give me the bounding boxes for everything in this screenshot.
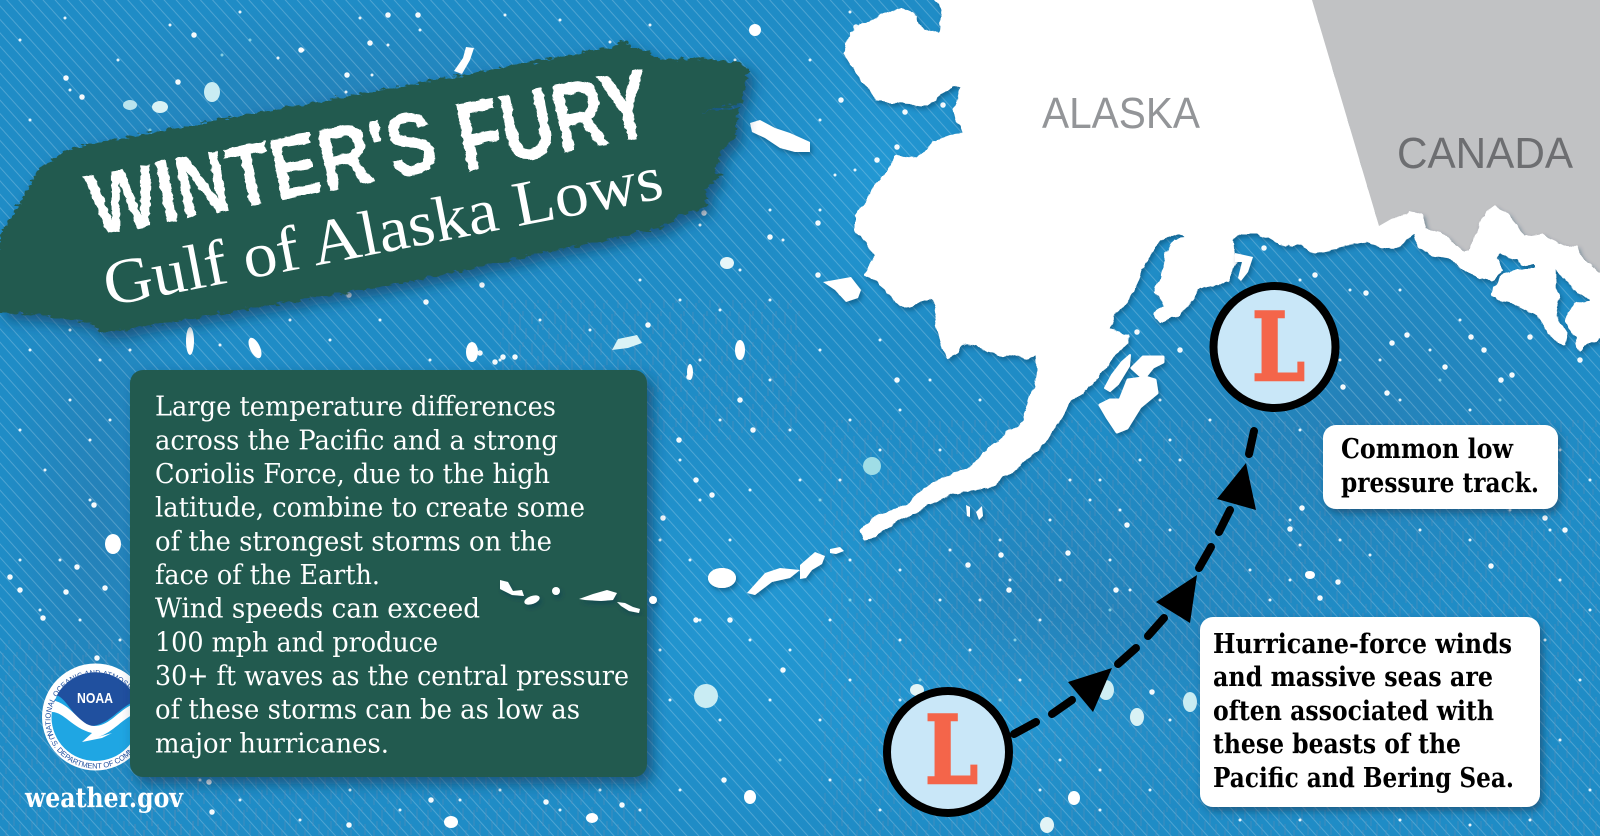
low pressure symbol: start <box>887 691 1009 813</box>
title: WINTER'S <box>80 90 444 255</box>
title: FURY <box>447 47 660 193</box>
callout: hurricane-force winds: these beasts of the <box>1213 729 1461 760</box>
callout: hurricane-force winds <box>1200 617 1540 807</box>
title brush stroke <box>0 40 749 332</box>
NOAA logo <box>42 664 130 770</box>
panel text block: Wind speeds can exceed <box>155 594 480 624</box>
panel text block: latitude, combine to create some <box>155 492 585 524</box>
Alaska landmass <box>845 0 1600 540</box>
callout: hurricane-force winds: and massive seas are <box>1213 662 1493 693</box>
NOAA logo: U.S. DEPARTMENT OF COMMERCE <box>48 734 130 769</box>
callout: track <box>1323 425 1558 509</box>
NOAA logo: NOAA <box>77 690 113 707</box>
panel text block: face of the Earth. <box>155 560 380 591</box>
panel text block: major hurricanes. <box>155 728 389 760</box>
panel text block: of these storms can be as low as <box>155 694 580 726</box>
ice flakes <box>105 24 1315 833</box>
Canada landmass <box>1312 0 1600 290</box>
panel text block: 100 mph and produce <box>155 628 438 658</box>
panel text block: of the strongest storms on the <box>155 526 552 558</box>
panel text block: across the Pacific and a strong <box>155 426 558 456</box>
callout: hurricane-force winds: Pacific and Bering Sea. <box>1213 763 1514 794</box>
callout: track: Common low <box>1341 434 1514 465</box>
panel background <box>130 370 647 777</box>
islands: Nunivak, Kodiak, Aleutians <box>708 120 1253 595</box>
label: Canada: CANADA <box>1397 129 1574 178</box>
panel text block: Coriolis Force, due to the high <box>155 459 550 490</box>
panel: explanation text <box>42 368 664 793</box>
low pressure symbol: end <box>1214 286 1336 408</box>
panel text block: 30+ ft waves as the central pressure <box>155 661 629 692</box>
islands over panel: western Aleutians <box>500 580 657 613</box>
label: Alaska: ALASKA <box>1042 89 1201 138</box>
callout: hurricane-force winds: often associated with <box>1213 696 1494 727</box>
title <box>80 47 660 255</box>
subtitle: Gulf of Alaska Lows <box>97 142 668 320</box>
arrow: common low pressure track <box>1014 431 1256 734</box>
panel text block <box>155 392 629 760</box>
website label: weather.gov <box>24 783 184 814</box>
low pressure symbol: start: L <box>925 696 978 806</box>
low pressure symbol: end: L <box>1252 293 1305 403</box>
NOAA logo: NATIONAL OCEANIC AND ATMOSPHERIC ADMINISTRATION <box>45 670 130 736</box>
callout: track: pressure track. <box>1341 468 1539 499</box>
panel text block: Large temperature differences <box>155 392 556 422</box>
callout: hurricane-force winds: Hurricane-force winds <box>1213 629 1512 660</box>
